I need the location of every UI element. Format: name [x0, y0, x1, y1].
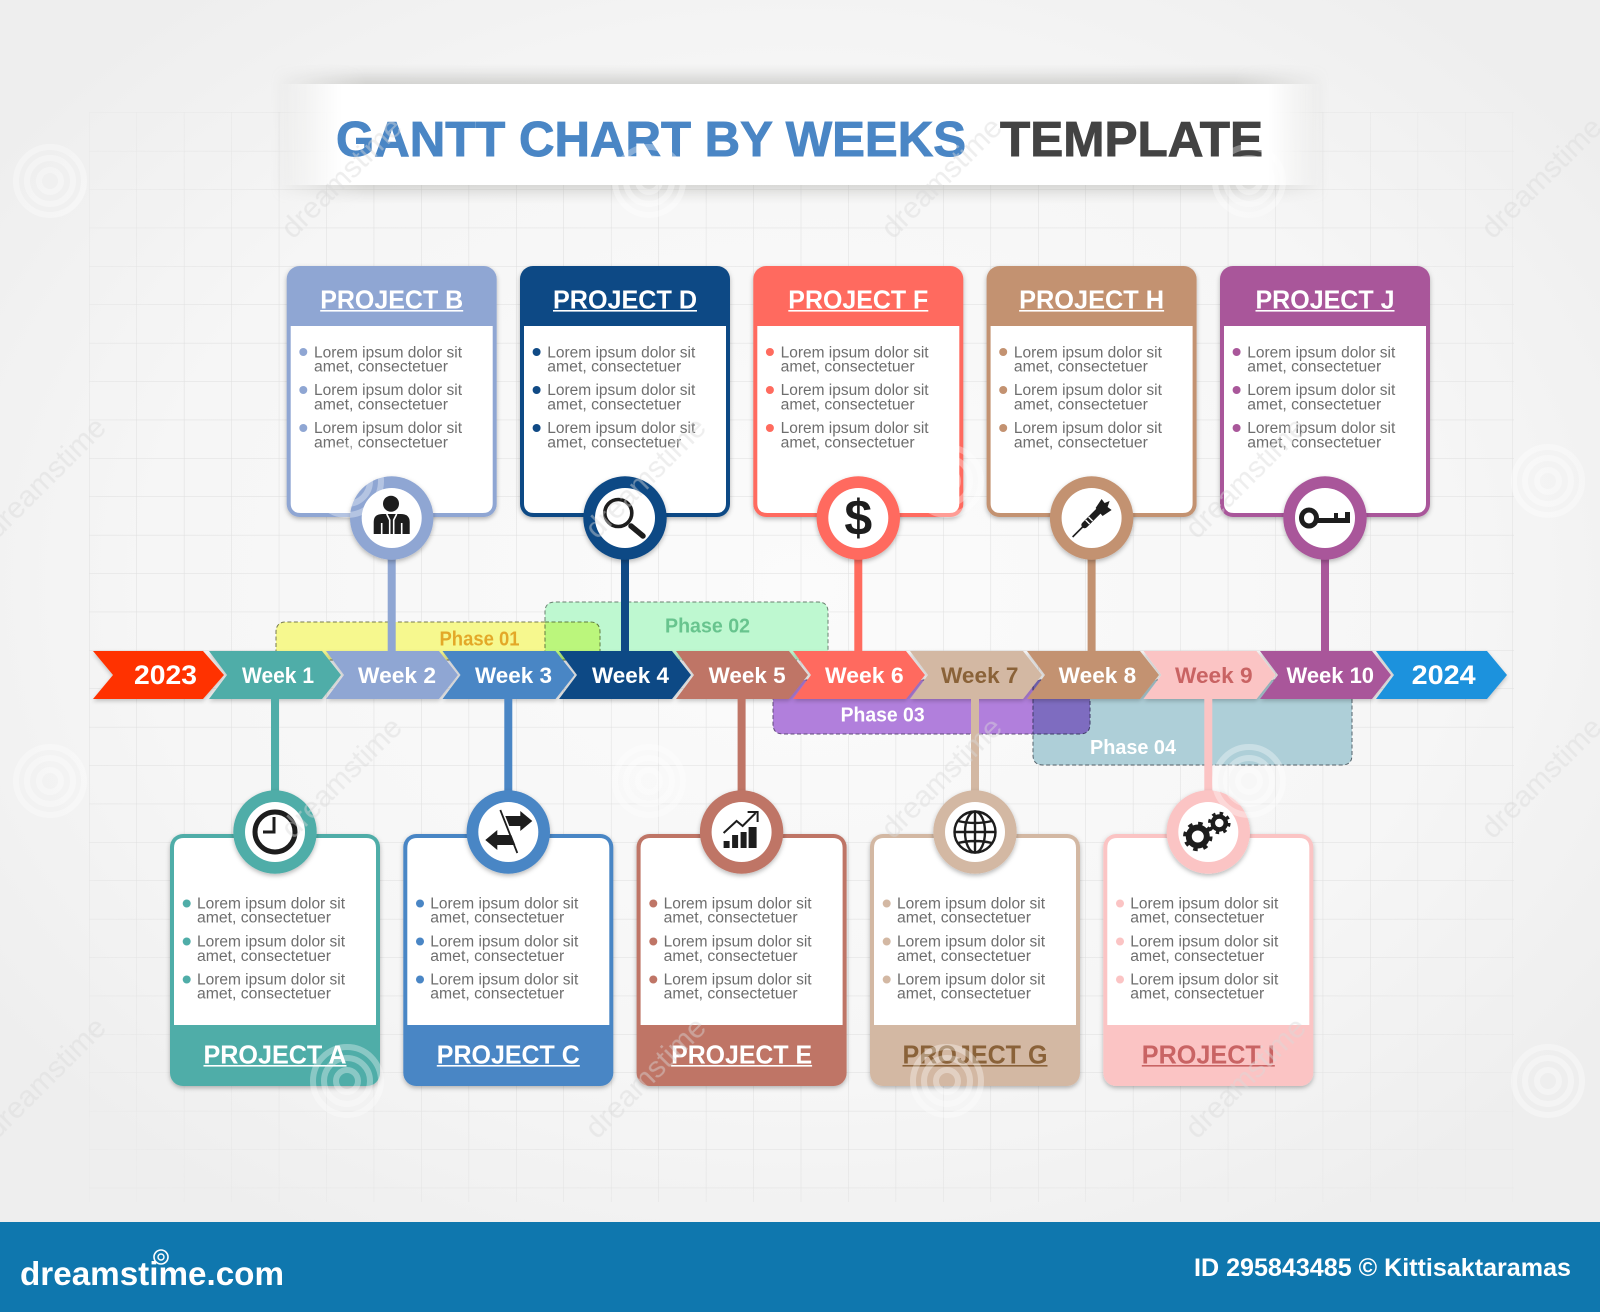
panel: project A: amet, consectetuer: [197, 986, 331, 1003]
panel: project B: Lorem ipsum dolor sit: [314, 420, 463, 437]
panel: project E: PROJECT E: [671, 1039, 812, 1069]
icon: key: [1283, 476, 1367, 560]
arrow: week 4: [559, 651, 691, 699]
panel: project G: Lorem ipsum dolor sit: [897, 934, 1046, 951]
panel: project J: PROJECT J: [1256, 284, 1394, 314]
panel: project E: amet, consectetuer: [664, 986, 798, 1003]
panel: project G: amet, consectetuer: [897, 910, 1031, 927]
arrow: 2023: 2023: [134, 660, 197, 690]
panel: project D: Lorem ipsum dolor sit: [547, 420, 696, 437]
icon: growth chart: [700, 790, 783, 874]
panel: project H: Lorem ipsum dolor sit: [1014, 344, 1163, 361]
title banner: [270, 76, 1330, 192]
arrow: week 6: [793, 651, 925, 699]
panel: project B: amet, consectetuer: [314, 396, 448, 414]
phase 01: Phase 01: [440, 629, 520, 651]
panel: project F: amet, consectetuer: [781, 396, 915, 414]
panel: project I: Lorem ipsum dolor sit: [1130, 972, 1279, 989]
watermark text: dreamstime: [1179, 411, 1313, 545]
phase 03: Phase 03: [841, 705, 925, 727]
watermark text: dreamstime: [875, 711, 1009, 845]
panel: project F: Lorem ipsum dolor sit: [781, 382, 929, 399]
footer logo: dreamstime.com: [20, 1255, 284, 1292]
panel: project J: amet, consectetuer: [1247, 359, 1381, 376]
panel: project E: Lorem ipsum dolor sit: [664, 972, 812, 989]
panel: project A: amet, consectetuer: [197, 910, 331, 927]
panel: project B: PROJECT B: [320, 284, 463, 314]
watermark text: dreamstime: [579, 411, 713, 545]
phase 04: [1033, 680, 1352, 765]
panel: project I: Lorem ipsum dolor sit: [1130, 934, 1279, 951]
timeline arrows: [93, 651, 1507, 699]
panel: project G: amet, consectetuer: [897, 948, 1031, 965]
arrow: week 10: [1260, 651, 1391, 699]
icon: clock: [233, 790, 317, 874]
arrow: week 7: Week 7: [941, 663, 1018, 688]
watermark text: dreamstime: [275, 111, 409, 245]
panel: project D: Lorem ipsum dolor sit: [547, 382, 696, 399]
panel: project J: Lorem ipsum dolor sit: [1247, 344, 1396, 361]
panel: project F: PROJECT F: [788, 284, 928, 314]
panel: project A: Lorem ipsum dolor sit: [197, 972, 346, 989]
arrow: week 8: Week 8: [1059, 663, 1136, 688]
panel: project I: [1103, 699, 1313, 1086]
panel: project F: amet, consectetuer: [781, 359, 915, 376]
icon: businessman: [350, 476, 433, 560]
phase bars: [276, 602, 1352, 765]
phase 03: [773, 680, 1090, 734]
arrow: week 1: Week 1: [242, 663, 314, 688]
panel: project C: amet, consectetuer: [430, 910, 564, 927]
arrow: week 8: [1027, 651, 1159, 699]
panel: project G: Lorem ipsum dolor sit: [897, 895, 1046, 912]
icon: two-way arrows: [467, 790, 550, 874]
panel: project A: amet, consectetuer: [197, 948, 331, 965]
arrow: week 10: Week 10: [1286, 663, 1374, 688]
panel: project F: Lorem ipsum dolor sit: [781, 420, 929, 437]
phase 02: [545, 602, 828, 660]
watermark text: dreamstime: [1179, 1011, 1313, 1145]
panel: project B: Lorem ipsum dolor sit: [314, 382, 463, 399]
panel: project I: Lorem ipsum dolor sit: [1130, 895, 1279, 912]
panel: project J: amet, consectetuer: [1247, 434, 1381, 451]
watermark spirals: [16, 147, 1582, 1115]
arrow: week 3: [442, 651, 574, 699]
panel: project C: PROJECT C: [437, 1039, 580, 1069]
watermark text: [0, 111, 1600, 1145]
panel: project H: [987, 266, 1197, 651]
panel: project C: [403, 699, 613, 1086]
footer credit: ID 295843485 © Kittisaktaramas: [1194, 1254, 1571, 1282]
panel: project D: PROJECT D: [553, 284, 697, 314]
panel: project B: amet, consectetuer: [314, 359, 448, 376]
panel: project E: Lorem ipsum dolor sit: [664, 934, 812, 951]
panel: project B: Lorem ipsum dolor sit: [314, 344, 463, 361]
panel: project G: amet, consectetuer: [897, 986, 1031, 1003]
panel: project D: [520, 266, 730, 651]
panel: project I: PROJECT I: [1142, 1039, 1275, 1069]
icon: dart: [1050, 476, 1133, 560]
arrow: week 3: Week 3: [475, 663, 552, 688]
icon: gears: [1167, 790, 1250, 874]
arrow: week 9: Week 9: [1175, 663, 1253, 688]
panel: project E: amet, consectetuer: [664, 948, 798, 965]
panel: project C: Lorem ipsum dolor sit: [430, 972, 579, 989]
panel: project D: amet, consectetuer: [547, 396, 681, 414]
panel: project H: Lorem ipsum dolor sit: [1014, 420, 1163, 437]
arrow: 2024: [1376, 651, 1507, 699]
panel: project F: [753, 266, 963, 651]
arrow: 2024: 2024: [1412, 660, 1476, 690]
panel: project J: Lorem ipsum dolor sit: [1247, 420, 1396, 437]
arrow: week 2: [326, 651, 458, 699]
panel: project I: amet, consectetuer: [1130, 986, 1264, 1003]
panel: project I: amet, consectetuer: [1130, 910, 1264, 927]
panel: project H: Lorem ipsum dolor sit: [1014, 382, 1163, 399]
arrow: week 5: [676, 651, 808, 699]
arrow: week 9: [1144, 651, 1276, 699]
watermark text: dreamstime: [275, 711, 409, 845]
phase 04: Phase 04: [1090, 737, 1177, 759]
title: GANTT CHART BY WEEKS: [336, 113, 966, 167]
panel: project J: amet, consectetuer: [1247, 396, 1381, 414]
watermark text: dreamstime: [579, 1011, 713, 1145]
arrow: week 1: [209, 651, 341, 699]
panel: project G: [870, 699, 1080, 1086]
arrow: week 2: Week 2: [358, 663, 436, 688]
footer bar: [0, 1222, 1600, 1312]
panel: project C: Lorem ipsum dolor sit: [430, 934, 579, 951]
panel: project J: Lorem ipsum dolor sit: [1247, 382, 1396, 399]
panel: project D: amet, consectetuer: [547, 359, 681, 376]
panel: project G: Lorem ipsum dolor sit: [897, 972, 1046, 989]
arrow: 2023: [93, 651, 224, 699]
panel: project C: Lorem ipsum dolor sit: [430, 895, 579, 912]
panel: project I: amet, consectetuer: [1130, 948, 1264, 965]
panel: project H: amet, consectetuer: [1014, 396, 1148, 414]
panel: project H: amet, consectetuer: [1014, 434, 1148, 451]
panel: project J: [1220, 266, 1430, 651]
panel: project E: amet, consectetuer: [664, 910, 798, 927]
panel: project H: PROJECT H: [1019, 284, 1164, 314]
icon: dollar: $: [844, 490, 872, 546]
panel: project E: Lorem ipsum dolor sit: [664, 895, 812, 912]
arrow: week 5: Week 5: [709, 663, 786, 688]
panel: project C: amet, consectetuer: [430, 986, 564, 1003]
panel: project E: [637, 699, 847, 1086]
icon: dollar: [817, 476, 900, 560]
panel: project D: Lorem ipsum dolor sit: [547, 344, 696, 361]
arrow: week 7: [910, 651, 1042, 699]
panel: project H: amet, consectetuer: [1014, 359, 1148, 376]
panel: project A: Lorem ipsum dolor sit: [197, 934, 346, 951]
phase 02: Phase 02: [665, 616, 750, 638]
watermark text: dreamstime: [875, 111, 1009, 245]
icon: magnifier: [583, 476, 667, 560]
icon: globe: [933, 790, 1017, 874]
panel: project F: Lorem ipsum dolor sit: [781, 344, 929, 361]
panel: project A: PROJECT A: [204, 1039, 347, 1069]
panel: project D: amet, consectetuer: [547, 434, 681, 451]
panel: project A: [170, 699, 380, 1086]
arrow: week 4: Week 4: [592, 663, 670, 688]
panel: project G: PROJECT G: [902, 1039, 1048, 1069]
panel: project C: amet, consectetuer: [430, 948, 564, 965]
panel: project B: amet, consectetuer: [314, 434, 448, 451]
panel: project B: [287, 266, 497, 651]
phase 01: [276, 622, 600, 660]
title: template: TEMPLATE: [1000, 113, 1263, 167]
arrow: week 6: Week 6: [825, 663, 904, 688]
panel: project F: amet, consectetuer: [781, 434, 915, 451]
panel: project A: Lorem ipsum dolor sit: [197, 895, 346, 912]
